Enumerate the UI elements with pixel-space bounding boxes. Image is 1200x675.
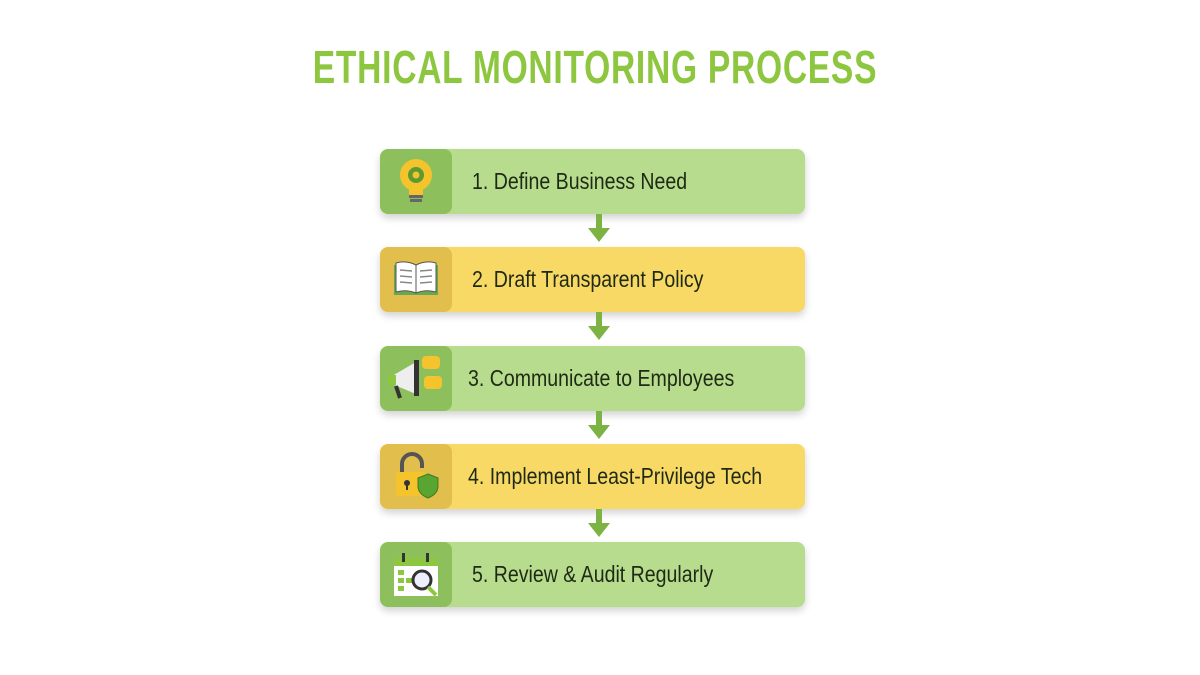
icon: lock shield — [380, 444, 452, 509]
step 5 — [380, 542, 805, 607]
step 3 — [380, 346, 805, 411]
label: 2. Draft Transparent Policy — [472, 266, 703, 292]
arrow 1 — [588, 214, 610, 242]
arrow 4 — [588, 509, 610, 537]
icon: book — [380, 247, 452, 312]
title: ETHICAL MONITORING PROCESS — [313, 41, 877, 93]
step 1 — [380, 149, 805, 214]
label: 1. Define Business Need — [472, 168, 687, 194]
icon: lightbulb gear — [380, 149, 452, 214]
icon: megaphone — [380, 346, 452, 411]
label: 5. Review & Audit Regularly — [472, 561, 713, 587]
arrow 3 — [588, 411, 610, 439]
step 2 — [380, 247, 805, 312]
step 4 — [380, 444, 805, 509]
arrow 2 — [588, 312, 610, 340]
label: 4. Implement Least-Privilege Tech — [468, 463, 762, 489]
icon: calendar magnifier — [380, 542, 452, 607]
label: 3. Communicate to Employees — [468, 365, 734, 391]
